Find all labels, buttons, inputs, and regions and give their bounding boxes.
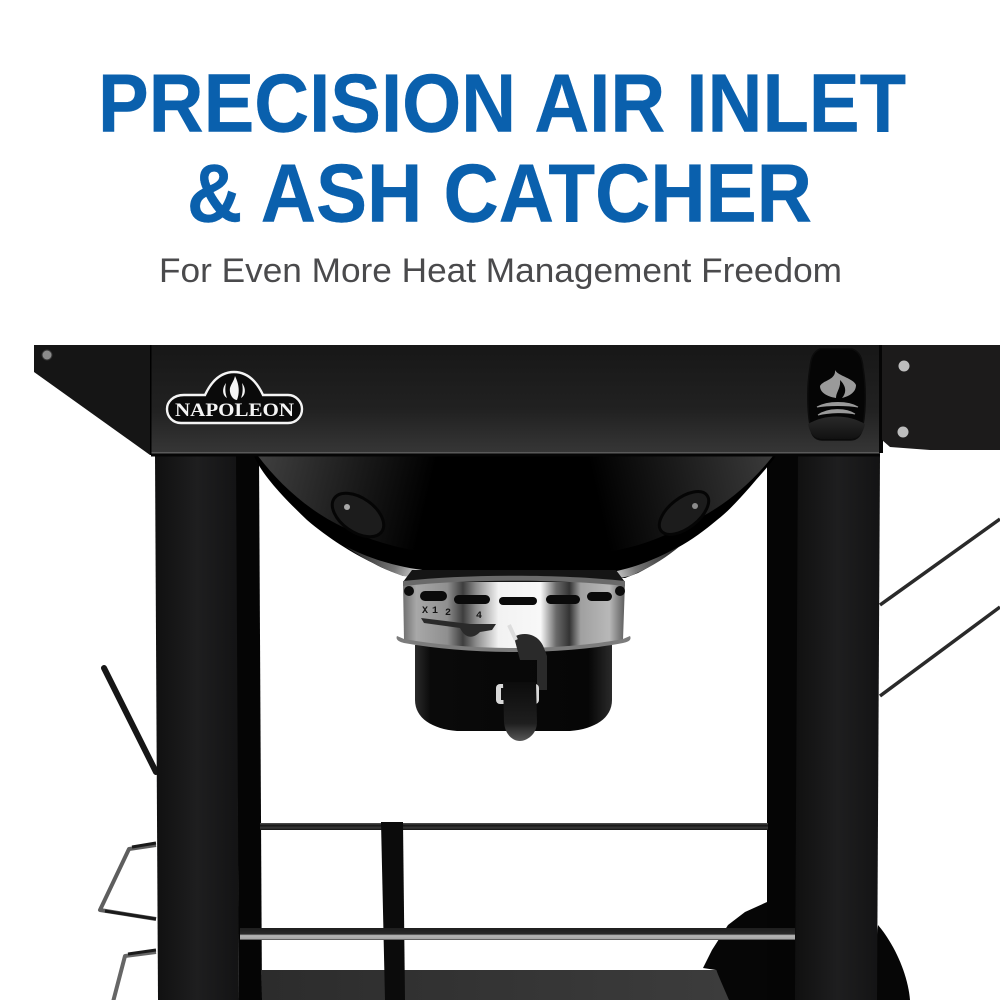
bowl lower right rim [600,546,680,579]
bowl left sheen [258,456,470,555]
title: PRECISION AIR INLET [98,56,906,150]
badge swoosh [817,402,858,415]
left wire basket [100,843,156,1000]
left side handle bar [104,668,156,772]
kettle bowl [253,454,777,579]
front control panel [151,345,880,453]
grill illustration [34,345,1000,1000]
logo flame [223,376,245,400]
right side bracket [882,345,1000,450]
damper scale: 4 [476,611,482,622]
title: & ASH CATCHER [187,146,812,240]
damper scale: 2 [445,608,451,619]
thermometer flame badge [808,349,865,440]
title [98,56,906,240]
flange [397,636,631,652]
damper track [421,618,496,637]
ash catcher pot [415,645,612,731]
wheels [703,902,910,1000]
bowl left vent [324,484,392,546]
bottom shelf [262,970,730,1000]
ash catcher handle [496,625,547,741]
damper scale: X [422,606,428,617]
front right leg [795,455,880,1000]
damper scale: 1 [432,606,438,617]
Napoleon logo badge [167,372,302,423]
bowl right vent [652,483,716,543]
front left leg [155,455,239,1000]
bowl right sheen [570,456,773,555]
badge flame [820,370,856,398]
lower rods [260,823,768,830]
logo wordmark: NAPOLEON [175,400,294,421]
bracket bolts [898,360,910,438]
vent slots [420,591,612,605]
subtitle: For Even More Heat Management Freedom [159,252,842,290]
damper scale [422,606,482,622]
screw [42,350,52,360]
chrome air inlet ring [397,570,631,652]
shelf strap [381,822,405,1000]
ring bolts [404,586,625,596]
bowl lower left rim [345,546,430,578]
rear legs [235,455,262,1000]
right side rods [880,519,1000,696]
left angled side panel [34,345,150,455]
